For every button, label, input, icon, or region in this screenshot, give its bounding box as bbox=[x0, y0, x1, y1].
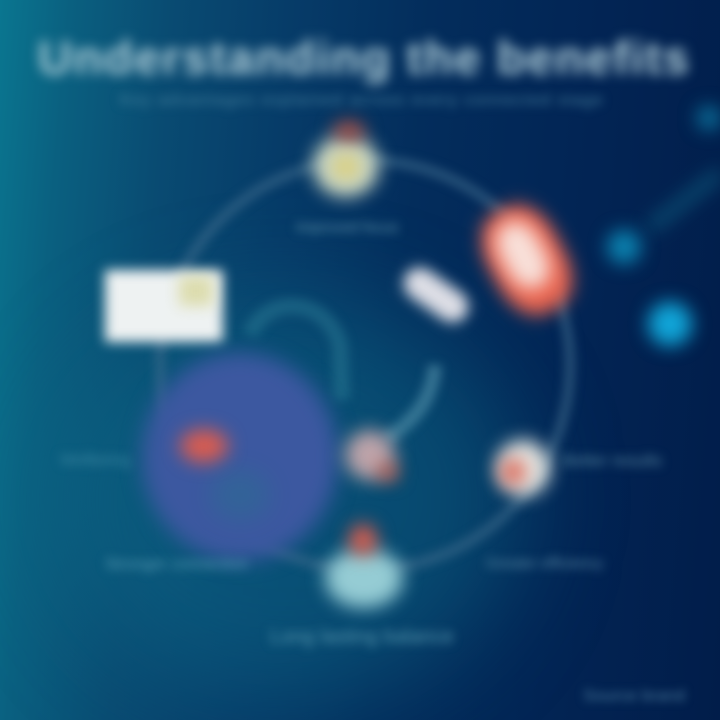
label: lower left: Stronger connection bbox=[105, 556, 248, 573]
inner connector arc bbox=[385, 365, 435, 440]
icon: red shield bbox=[466, 190, 588, 330]
label: top node: Improved focus bbox=[296, 219, 399, 236]
icon: white pill bbox=[393, 256, 479, 334]
footer logo text: Source brand bbox=[583, 686, 685, 705]
network node top right bbox=[697, 106, 720, 130]
icon: blue globe bbox=[133, 344, 345, 570]
panel: white card bbox=[95, 260, 233, 352]
label: bottom node: Long lasting balance bbox=[270, 626, 453, 648]
subtitle: Key advantages explained across every connected stage bbox=[120, 92, 604, 109]
icon: top node bbox=[300, 108, 392, 210]
label: left: Wellbeing bbox=[60, 452, 130, 469]
label: right node: Better results bbox=[562, 451, 662, 470]
title: Understanding the benefits bbox=[38, 31, 691, 84]
icon: right lower node bbox=[482, 426, 564, 510]
background glow bbox=[50, 300, 520, 700]
outer ring bbox=[160, 160, 570, 570]
icon: central node bbox=[333, 417, 410, 494]
inner arc bbox=[250, 306, 342, 400]
network link bbox=[646, 168, 720, 233]
label: lower right: Greater efficiency bbox=[486, 555, 603, 572]
network node lower bbox=[648, 302, 692, 346]
network node middle bbox=[607, 230, 641, 264]
icon: bottom node bbox=[313, 512, 415, 620]
